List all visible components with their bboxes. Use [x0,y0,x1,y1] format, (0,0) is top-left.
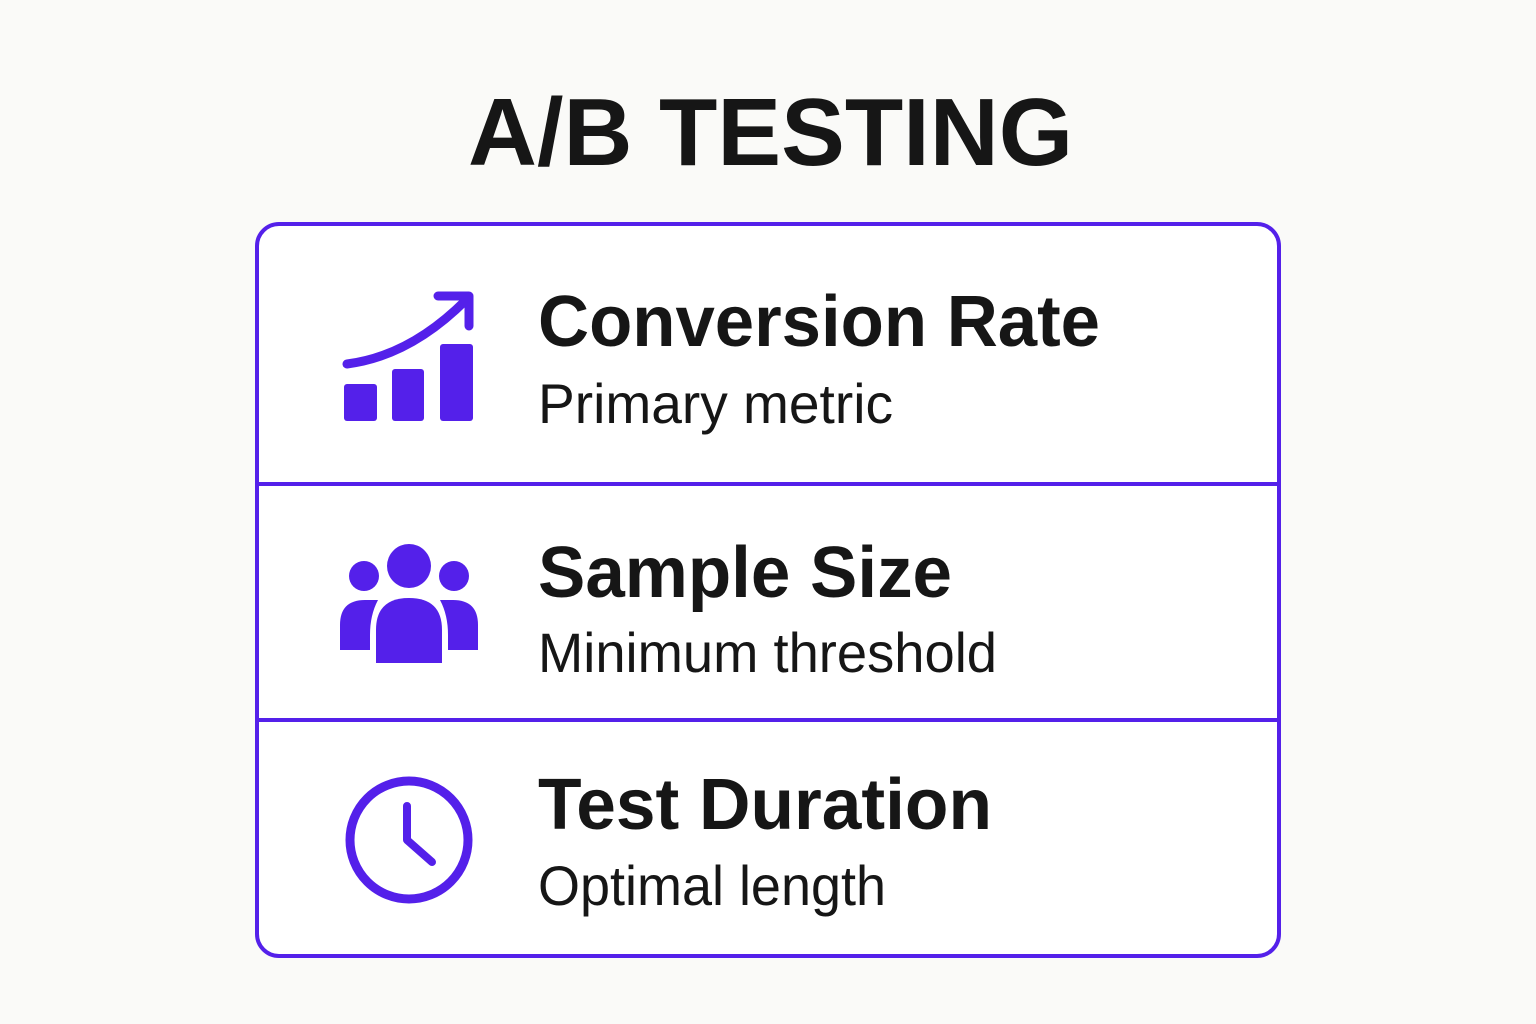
title: A/B TESTING [468,79,1073,186]
text: optimal length: Optimal length [538,854,886,917]
icon: people [340,544,478,663]
icon: growth chart [344,296,473,421]
text: primary metric: Primary metric [538,372,893,435]
icon: clock [350,781,468,899]
heading: test duration: Test Duration [538,765,992,845]
heading: conversion rate: Conversion Rate [538,282,1100,362]
text: minimum threshold: Minimum threshold [538,621,997,684]
heading: sample size: Sample Size [538,533,952,613]
panel: metrics card [257,224,1279,956]
